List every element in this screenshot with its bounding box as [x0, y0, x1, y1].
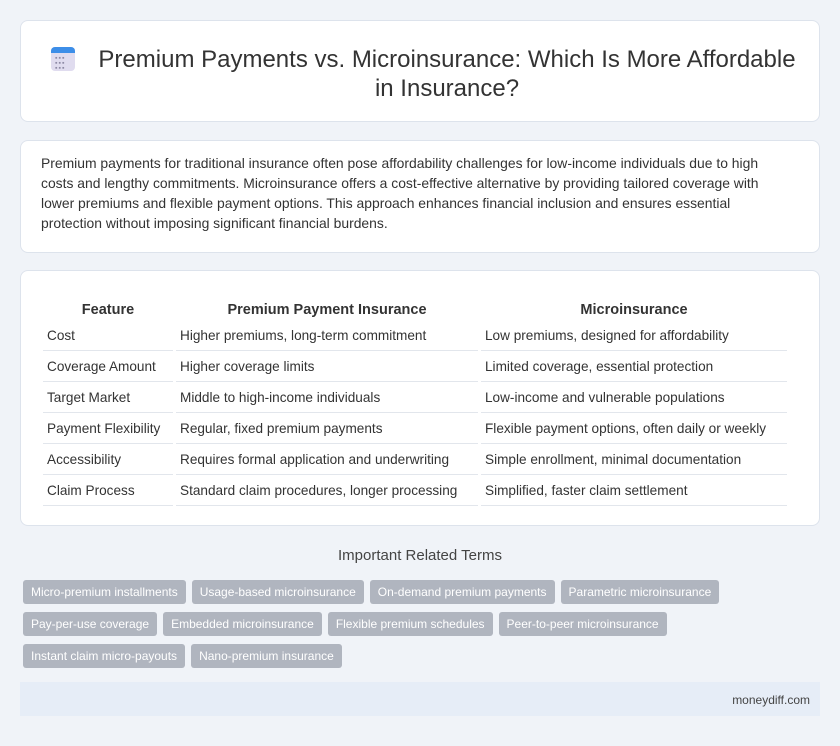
icon: calendar: ▪▪▪ — [55, 55, 65, 62]
comparison table: Requires formal application and underwriting — [180, 452, 449, 466]
related terms tags: Flexible premium schedules — [336, 617, 485, 631]
related terms tags: Micro-premium installments — [31, 585, 178, 599]
comparison table: Payment Flexibility — [47, 420, 160, 436]
related terms heading: Important Related Terms — [338, 547, 502, 564]
comparison table: Cost — [47, 328, 75, 342]
comparison table: Coverage Amount — [47, 358, 156, 374]
comparison table: Flexible payment options, often daily or weekly — [485, 420, 766, 436]
comparison table: Low premiums, designed for affordability — [485, 328, 729, 342]
comparison table: Target Market — [47, 390, 130, 404]
comparison table: Higher coverage limits — [180, 358, 314, 374]
related terms tags: On-demand premium payments — [378, 585, 547, 599]
comparison table: Limited coverage, essential protection — [485, 358, 713, 374]
icon: calendar: ▪▪▪ — [55, 60, 65, 67]
comparison table: Simple enrollment, minimal documentation — [485, 452, 741, 466]
comparison table: Microinsurance — [580, 302, 688, 318]
footer — [20, 682, 820, 716]
comparison table — [20, 270, 820, 526]
comparison table: Premium Payment Insurance — [227, 302, 427, 318]
comparison table: Accessibility — [47, 452, 121, 466]
related terms tags: Instant claim micro-payouts — [31, 649, 177, 663]
comparison table: Simplified, faster claim settlement — [485, 482, 687, 498]
comparison table: Standard claim procedures, longer processing — [180, 482, 457, 498]
intro text — [20, 140, 820, 253]
comparison table: Feature — [82, 302, 134, 318]
comparison table: Low-income and vulnerable populations — [485, 390, 725, 404]
header card — [20, 20, 820, 122]
intro text: Premium payments for traditional insurance often pose affordability challenges for low-income individuals due to high costs and lengthy commitments. Microinsurance offers a cost-effective alternative by providing tailored coverage with lower premiums and flexible payment options. This approach enhances financial inclusion and ensures essential protection without imposing significant financial burdens. — [41, 155, 759, 231]
related terms tags: Pay-per-use coverage — [31, 617, 149, 631]
related terms tags: Peer-to-peer microinsurance — [507, 617, 659, 631]
footer: moneydiff.com — [732, 693, 810, 707]
comparison table: Middle to high-income individuals — [180, 390, 380, 404]
related terms tags — [23, 580, 719, 668]
related terms tags: Embedded microinsurance — [171, 617, 314, 631]
comparison table: Higher premiums, long-term commitment — [180, 328, 426, 342]
related terms tags: Usage-based microinsurance — [200, 585, 356, 599]
title: Premium Payments vs. Microinsurance: Which Is More Affordable in Insurance? — [98, 46, 796, 102]
related terms tags: Parametric microinsurance — [569, 585, 711, 599]
comparison table: Claim Process — [47, 482, 135, 498]
icon: calendar — [51, 47, 75, 71]
related terms tags: Nano-premium insurance — [199, 649, 334, 663]
comparison table: Regular, fixed premium payments — [180, 420, 382, 436]
